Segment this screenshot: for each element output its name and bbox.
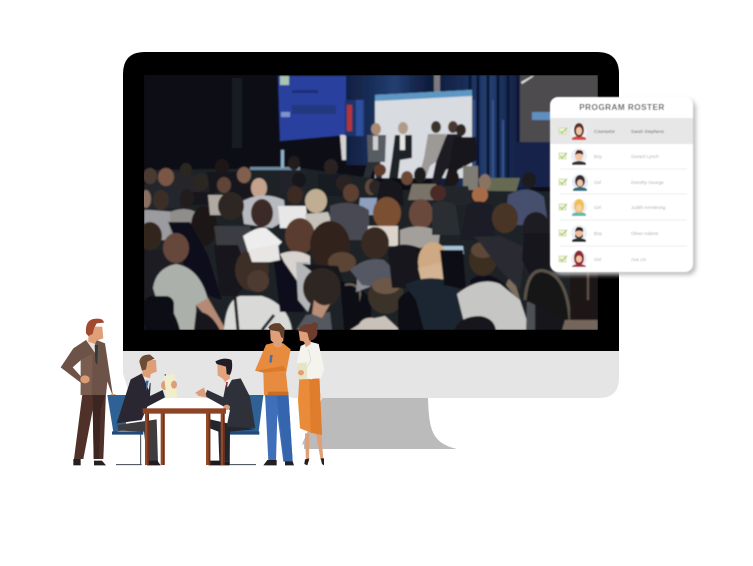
- monitor chin: [123, 345, 619, 398]
- seated man right: [195, 359, 255, 465]
- man with backpack straps: [235, 249, 269, 291]
- foreground left: [138, 222, 292, 330]
- hall background: [144, 75, 550, 192]
- meeting table: [143, 398, 226, 465]
- row: Judith Armstrong: Judith Armstrong: [631, 205, 666, 210]
- man in grey polo: [163, 233, 189, 263]
- foreground right: [388, 230, 598, 330]
- row: Gerard Lynch: Gerard Lynch: [631, 154, 659, 159]
- highlighted row: [550, 118, 693, 144]
- row: Judith Armstrong: Girl: [594, 205, 601, 210]
- row: Ava Lin: [559, 250, 647, 267]
- row: Gerard Lynch: [559, 148, 659, 165]
- row: Sarah Stephens: Counselor: [594, 129, 615, 134]
- standing woman with folder: [297, 322, 324, 465]
- right chair: [228, 395, 263, 465]
- middle rows: [144, 176, 549, 254]
- illustration: business people meeting: [61, 319, 324, 467]
- card shadow: [553, 100, 696, 275]
- left chair: [107, 395, 143, 465]
- panel: program roster: [550, 97, 696, 275]
- right presentation screen: [520, 75, 598, 142]
- photo: conference audience: [138, 75, 598, 330]
- panelists: [363, 160, 382, 178]
- audience base: [144, 168, 598, 330]
- foreground bottom left chair: [145, 314, 180, 330]
- left presentation screen: [278, 76, 347, 141]
- standing man in orange sweater: [255, 323, 294, 465]
- roster heading: PROGRAM ROSTER: [579, 103, 665, 112]
- row: Oliver Adams: Oliver Adams: [631, 231, 659, 236]
- row: Dorothy George: Girl: [594, 180, 601, 185]
- row: Sarah Stephens: [559, 123, 665, 140]
- white cut-out halo: [93, 373, 304, 467]
- standing man in brown suit: [61, 319, 117, 465]
- infographic: [60, 52, 698, 466]
- white shirt man: [243, 228, 282, 252]
- flags and speaker: [345, 100, 366, 135]
- row: Ava Lin: Girl: [594, 257, 601, 262]
- foreground middle: [274, 218, 436, 330]
- back rows: [143, 150, 548, 225]
- row: Sarah Stephens: Sarah Stephens: [631, 129, 665, 134]
- card body: [550, 97, 693, 272]
- stage curtains: [346, 75, 435, 165]
- row: Oliver Adams: [559, 225, 659, 242]
- monitor bezel: [123, 52, 619, 351]
- monitor stand: [300, 398, 457, 449]
- seated man left: [117, 355, 177, 465]
- row: Dorothy George: Dorothy George: [631, 180, 664, 185]
- row: Oliver Adams: Boy: [594, 231, 603, 236]
- row: Judith Armstrong: [559, 199, 666, 216]
- row: Dorothy George: [559, 174, 664, 191]
- row: Ava Lin: Ava Lin: [631, 257, 647, 262]
- panel backdrop: [375, 90, 472, 178]
- row: Gerard Lynch: Boy: [594, 154, 603, 159]
